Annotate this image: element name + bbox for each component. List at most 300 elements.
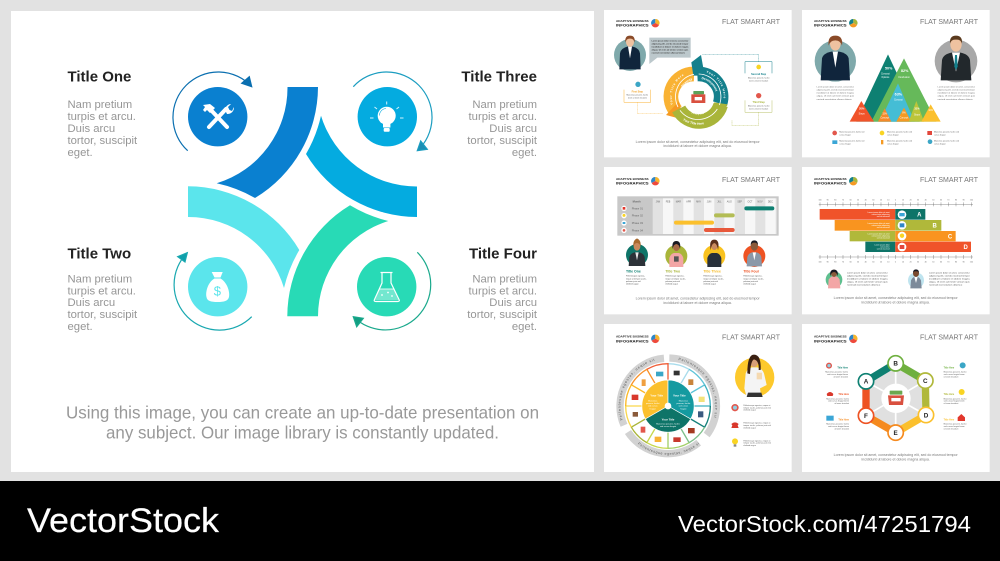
bar labels: Lorem ipsum dolor xyxy=(875,244,890,246)
group: Title One xyxy=(68,68,138,159)
pie labels: posuere, facilisi xyxy=(646,402,660,405)
list text: Pellentesque egestas, neque at xyxy=(743,404,771,407)
bar letters: A xyxy=(917,213,922,219)
text block: left: nostrud exercitation ullamco xyxy=(847,284,881,287)
pyramid labels: 8% xyxy=(902,112,906,114)
axis: bottom: 100 xyxy=(970,261,973,263)
gantt labels: AUG xyxy=(727,200,732,203)
step: third: Third Step xyxy=(753,101,765,104)
legend: cursus feugiat xyxy=(887,133,899,136)
speech bubble: incididunt ut labore et dolore magna xyxy=(652,46,689,49)
text block: tortor, suscipit xyxy=(68,309,138,321)
portrait: man xyxy=(908,269,924,288)
gantt labels: FEB xyxy=(666,201,671,203)
title blocks xyxy=(626,269,764,286)
text block: tortor, suscipit xyxy=(467,309,538,321)
gantt labels: Phase 01 xyxy=(632,206,643,210)
axis: bottom: 70 xyxy=(947,261,949,263)
gantt labels xyxy=(632,200,773,232)
speech bubble: adipiscing elit, sed do eiusmod tempor xyxy=(652,43,688,46)
text block: right: incididunt ut labore et dolore magna xyxy=(929,278,971,281)
list text: Pellentesque egestas, neque at xyxy=(743,422,771,425)
heading: Title Two xyxy=(68,246,131,262)
pyramid labels: Steps xyxy=(914,113,921,116)
legend: cursus feugiat xyxy=(839,142,851,145)
caption: any subject. Our image library is constantly updated. xyxy=(106,422,499,442)
speech bubble: Lorem ipsum dolor sit amet, consectetur xyxy=(652,40,688,43)
pie labels: sed cursus xyxy=(648,405,657,408)
axis: top: 100 xyxy=(818,199,822,201)
curved segment: cyan xyxy=(188,186,299,288)
list text: tempor iaculis, pulvinar justo nisl xyxy=(743,406,772,409)
text block: right: Lorem ipsum dolor sit amet, consectetur xyxy=(938,86,975,89)
right labels: Maecenas posuere, facilisi xyxy=(944,397,967,400)
title blocks: pulvinar justo nisl xyxy=(743,280,759,283)
text block: right: aliqua. Ut enim ad minim veniam quis xyxy=(929,281,970,284)
wheel: outer arrows xyxy=(620,358,716,454)
step: third xyxy=(732,93,772,126)
axis: top: 20 xyxy=(910,199,912,201)
list text: tempor iaculis, pulvinar justo nisl xyxy=(743,442,772,445)
hexagon: letters: E xyxy=(894,430,898,437)
caption xyxy=(834,453,959,461)
axis: top: 40 xyxy=(865,199,867,201)
pie labels: feugiat xyxy=(650,407,656,410)
header: FLAT SMART ART xyxy=(920,177,979,184)
axis: top: 80 xyxy=(834,199,836,201)
speech bubble xyxy=(649,38,691,64)
gantt labels: NOV xyxy=(757,201,763,203)
axis: bottom: 20 xyxy=(880,261,882,263)
portrait: four xyxy=(743,240,765,267)
title blocks: eleifend augue xyxy=(626,284,639,286)
text block: eget. xyxy=(512,147,537,159)
legend: Maecenas posuere, facilisi sed xyxy=(839,132,864,134)
left labels: Maecenas posuere, facilisi xyxy=(825,371,849,374)
hexagon: letters: B xyxy=(893,361,898,368)
header: FLAT SMART ART xyxy=(722,19,781,26)
gantt labels: Phase 04 xyxy=(632,228,643,232)
title blocks: pulvinar justo nisl xyxy=(626,280,641,283)
step: first xyxy=(624,82,663,114)
panel: gantt chart thumbnail xyxy=(604,167,792,314)
caption xyxy=(66,402,539,442)
header: FLAT SMART ART xyxy=(920,335,979,342)
caption: Lorem ipsum dolor sit amet, consectetur adipiscing elit, sed do eiusmod tempor xyxy=(834,296,959,300)
footer bar xyxy=(0,481,1000,561)
right labels: sed cursus feugiat lorem xyxy=(944,425,965,428)
portrait: woman xyxy=(735,355,774,397)
bar labels: consectetur adipiscing xyxy=(872,224,890,227)
brand name: VectorStock xyxy=(27,502,220,540)
right labels: Title Here xyxy=(944,367,955,370)
axis: top: 100 xyxy=(970,199,973,201)
icon: money bag xyxy=(188,257,247,316)
title blocks: eleifend augue xyxy=(703,284,716,286)
logo xyxy=(814,19,858,28)
text block: Nam pretium xyxy=(472,274,537,286)
text block: eget. xyxy=(512,321,537,333)
pie labels: sed cursus xyxy=(679,405,688,408)
panel: pyramid diagram thumbnail xyxy=(802,10,990,157)
axis: bottom: 100 xyxy=(818,261,822,263)
left labels: ut lorem tincidunt xyxy=(834,427,849,430)
list text xyxy=(743,404,772,447)
pyramid labels: Options xyxy=(881,76,890,79)
logo: ADAPTIVE BUSINESS xyxy=(616,19,649,23)
step: first: First Step xyxy=(632,91,644,94)
bar letters: B xyxy=(933,224,938,230)
axis: top: 30 xyxy=(872,199,874,201)
text block: right: adipiscing elit, sed do eiusmod tempor xyxy=(929,275,970,278)
gantt labels: MAR xyxy=(676,200,681,203)
axis: top: 80 xyxy=(955,199,957,201)
wheel: segment outlines xyxy=(626,364,710,448)
cycle labels xyxy=(670,70,726,125)
text block: right xyxy=(938,86,976,101)
bar labels: consectetur xyxy=(880,245,890,248)
portrait: one xyxy=(626,238,648,266)
group: Title Four xyxy=(467,246,538,333)
wheel: outer ring labels: Pellentesque egestas, neque sit xyxy=(678,358,718,418)
legend: cursus feugiat xyxy=(839,133,851,136)
text block: Nam pretium xyxy=(472,99,537,111)
title blocks: neque at tempor iaculis, xyxy=(743,277,764,280)
left labels: sed cursus feugiat lorem xyxy=(827,373,848,376)
panel: hexagon diagram thumbnail xyxy=(802,324,990,472)
text block: Nam pretium xyxy=(68,99,132,111)
title blocks: Pellentesque egestas, xyxy=(703,275,723,278)
text block: left: Lorem ipsum dolor sit amet, consectetur xyxy=(847,272,888,275)
logo xyxy=(616,335,660,343)
axis: top: 90 xyxy=(963,199,965,201)
wheel: outer ring labels: Pellentesque egestas, neque sit xyxy=(638,442,700,456)
text block: eget. xyxy=(68,321,93,333)
hexagon: letters: F xyxy=(864,413,868,420)
left labels: ut lorem tincidunt xyxy=(834,402,849,405)
bar labels: sed do eiusmod xyxy=(877,238,890,240)
gantt labels: JAN xyxy=(656,200,661,203)
right labels: sed cursus feugiat lorem xyxy=(944,400,965,403)
wheel: segment icons xyxy=(632,371,705,442)
left labels: Maecenas posuere, facilisi xyxy=(826,423,850,426)
axis: bottom: 50 xyxy=(857,261,859,263)
list text: eleifend augue xyxy=(743,427,756,429)
caption: Lorem ipsum dolor sit amet, consectetur adipiscing elit, sed do eiusmod tempor xyxy=(636,140,761,144)
axis: top: 70 xyxy=(842,199,844,201)
title blocks: eleifend augue xyxy=(665,284,678,286)
cycle labels: Your Title Here xyxy=(706,70,726,98)
image url: VectorStock.com/47251794 xyxy=(678,511,971,537)
pie labels: Maecenas xyxy=(679,400,688,402)
step: first: lorem ut lorem tincidunt xyxy=(628,97,647,100)
axis: top: 60 xyxy=(850,199,852,201)
bar labels: Lorem ipsum dolor sit amet xyxy=(868,211,890,214)
title blocks: Title Two xyxy=(665,269,680,273)
heading: Title Four xyxy=(469,246,537,262)
text block: left: adipiscing elit, sed do eiusmod tempor xyxy=(817,89,854,92)
text block: turpis et arcu. xyxy=(68,286,136,298)
title blocks: Pellentesque egestas, xyxy=(665,275,685,278)
pie labels: Your Title xyxy=(650,393,663,397)
logo: ADAPTIVE BUSINESS xyxy=(814,177,847,181)
arrow: cyan ring xyxy=(174,253,252,330)
pyramid labels: 10% xyxy=(928,110,933,112)
logo: INFOGRAPHICS xyxy=(616,23,649,28)
bar labels: consectetur adipiscing xyxy=(872,235,890,238)
pyramid labels: 15% xyxy=(882,114,887,116)
axis: bottom: 0 xyxy=(895,261,896,263)
text block: turpis et arcu. xyxy=(469,286,537,298)
text block: right: nostrud exercitation ullamco laboris xyxy=(938,98,973,101)
axis: bottom: 30 xyxy=(917,261,919,263)
step: first: Maecenas posuere, facilisi xyxy=(627,95,649,97)
wheel: outer ring labels: Pellentesque egestas, neque sit xyxy=(618,358,655,420)
hexagon: letters xyxy=(864,361,929,437)
logo: ADAPTIVE BUSINESS xyxy=(814,335,847,339)
title blocks: Title Four xyxy=(743,269,760,273)
gantt chart xyxy=(617,196,779,236)
pyramid labels: Conclusion xyxy=(898,77,910,79)
right labels xyxy=(944,362,967,430)
axis: bottom: 90 xyxy=(827,261,829,263)
caption: incididunt ut labore et dolore magna aliqua. xyxy=(663,301,732,305)
speech bubble: nostrud exercitation ullamco laboris xyxy=(652,52,686,55)
pyramid labels: 20% xyxy=(859,107,865,111)
wheel: outer ring labels xyxy=(618,358,718,456)
text block: turpis et arcu. xyxy=(68,111,136,123)
gantt row icons xyxy=(621,206,627,233)
title blocks: eleifend augue xyxy=(743,284,756,286)
text block: right: adipiscing elit, sed do eiusmod tempor xyxy=(938,89,975,92)
axis: bottom: 40 xyxy=(865,261,867,263)
legend: cursus feugiat xyxy=(934,133,946,136)
portrait: woman xyxy=(826,270,842,288)
bar labels: Lorem ipsum dolor sit amet xyxy=(868,233,890,236)
axis: top: 20 xyxy=(880,199,882,201)
title blocks: Title One xyxy=(626,269,641,273)
legend: cursus feugiat xyxy=(934,142,946,145)
bar labels: consectetur adipiscing xyxy=(872,213,890,216)
heading: Title Three xyxy=(461,68,537,86)
bar letters: D xyxy=(964,245,969,251)
bar labels: sed do eiusmod xyxy=(877,216,890,218)
text block: left: incididunt ut labore et dolore magna xyxy=(817,92,855,95)
pie labels: Maecenas xyxy=(648,400,657,402)
cycle labels: Development xyxy=(702,76,718,92)
pyramid labels xyxy=(859,66,933,119)
right labels: ut lorem tincidunt xyxy=(944,427,959,430)
text block xyxy=(467,274,538,333)
pyramid labels: 63% xyxy=(895,93,903,97)
text block: left: nostrud exercitation ullamco laboris xyxy=(817,98,852,101)
portrait: two xyxy=(665,241,687,267)
list text: eleifend augue xyxy=(743,445,756,447)
step: second: Second Step xyxy=(751,73,767,76)
left labels: Title Here xyxy=(838,393,850,396)
legend: Maecenas posuere, facilisi sed xyxy=(839,141,864,143)
logo: INFOGRAPHICS xyxy=(616,338,649,343)
logo: ADAPTIVE BUSINESS xyxy=(814,19,847,23)
right labels: Maecenas posuere, facilisi xyxy=(944,371,967,374)
icon: flask xyxy=(357,257,416,316)
curved segment: green xyxy=(287,205,388,316)
legend: Maecenas posuere, facilisi sed xyxy=(887,132,912,134)
title blocks: Pellentesque egestas, xyxy=(743,275,763,278)
text block: Duis arcu xyxy=(489,297,537,309)
legend xyxy=(832,131,959,145)
gantt labels: Phase 02 xyxy=(632,214,643,218)
title blocks: pulvinar justo nisl xyxy=(703,280,719,283)
bar labels: sed do eiusmod xyxy=(877,227,890,229)
logo: INFOGRAPHICS xyxy=(616,181,649,186)
axis: bottom: 70 xyxy=(842,261,844,263)
pie labels: sed cursus feugiat xyxy=(660,425,676,428)
text block: left: aliqua. Ut enim ad minim veniam quis xyxy=(817,95,854,98)
logo xyxy=(814,177,858,186)
hexagon: letters: A xyxy=(864,379,869,386)
hexagon: edges xyxy=(866,363,926,433)
pyramid labels: Concept xyxy=(900,116,909,119)
cycle labels: Your Title Here xyxy=(670,74,684,106)
text block: right: Lorem ipsum dolor sit amet, consectetur xyxy=(929,272,970,275)
logo: INFOGRAPHICS xyxy=(814,23,847,28)
axis: top xyxy=(818,199,973,206)
caption xyxy=(636,140,761,148)
axis: bottom: 60 xyxy=(850,261,852,263)
right labels: ut lorem tincidunt xyxy=(944,375,959,378)
axis: bottom: 10 xyxy=(902,261,904,263)
text block: right xyxy=(929,272,971,287)
axis: bottom: 90 xyxy=(963,261,965,263)
hexagon: inner xyxy=(866,363,926,433)
text block: left: aliqua. Ut enim ad minim veniam quis xyxy=(847,281,888,284)
legend: Maecenas posuere, facilisi sed xyxy=(934,132,959,134)
gantt bars xyxy=(744,206,774,210)
gantt labels: Month xyxy=(633,200,641,204)
legend: Maecenas posuere, facilisi sed xyxy=(887,141,912,143)
axis: top: 90 xyxy=(827,199,829,201)
bar letters xyxy=(917,213,969,251)
text block: right: incididunt ut labore et dolore magna xyxy=(938,92,976,95)
text block: Duis arcu xyxy=(68,297,115,309)
hexagon: letters: C xyxy=(923,378,928,385)
arrow: dark blue ring xyxy=(173,72,252,151)
text block xyxy=(68,274,138,333)
text block: tortor, suscipit xyxy=(68,135,138,147)
pyramid labels: Steps xyxy=(859,113,865,116)
gantt labels: SEP xyxy=(737,201,742,203)
logo xyxy=(814,335,858,343)
arrow: green ring xyxy=(353,252,431,330)
icon: alarm clock xyxy=(731,404,739,411)
panel: main four-part diagram xyxy=(11,11,594,472)
heading: Title One xyxy=(68,68,131,86)
step: second: Maecenas posuere, facilisi xyxy=(748,77,770,79)
text block: left xyxy=(817,86,855,101)
axis: bottom: 30 xyxy=(872,261,874,263)
text block: eget. xyxy=(68,147,93,159)
text block: right: aliqua. Ut enim ad minim veniam quis xyxy=(938,95,975,98)
header: FLAT SMART ART xyxy=(722,177,781,184)
text block: tortor, suscipit xyxy=(467,135,538,147)
caption xyxy=(834,296,959,304)
icon: light bulb xyxy=(358,87,417,146)
left labels: Maecenas posuere, facilisi xyxy=(826,397,850,400)
axis: bottom: 40 xyxy=(925,261,927,263)
cycle labels: Strategy xyxy=(681,78,692,86)
step: second: lorem ut lorem tincidunt xyxy=(749,79,769,82)
bars chart xyxy=(820,209,971,252)
right labels: Maecenas posuere, facilisi xyxy=(944,423,967,426)
portrait: woman xyxy=(815,36,856,82)
axis: bottom: 80 xyxy=(955,261,957,263)
hexagon: nodes xyxy=(858,356,934,440)
pyramids chart xyxy=(850,54,941,122)
pyramid labels: 31% xyxy=(914,107,920,111)
axis: bottom: 10 xyxy=(887,261,889,263)
axis: bottom xyxy=(818,255,973,263)
group: Title Three xyxy=(461,68,538,159)
portrait xyxy=(614,36,646,71)
text block: turpis et arcu. xyxy=(469,111,537,123)
pie labels xyxy=(646,393,691,428)
logo: INFOGRAPHICS xyxy=(814,338,847,343)
icon: center shop xyxy=(691,91,705,103)
text block: right: nostrud exercitation ullamco xyxy=(929,284,963,287)
list text: eleifend augue xyxy=(743,410,756,412)
logo xyxy=(616,19,660,28)
text block: left: Lorem ipsum dolor sit amet, consectetur xyxy=(817,86,854,89)
axis: bottom: 80 xyxy=(834,261,836,263)
pie labels: posuere, facilisi xyxy=(676,402,691,405)
axis: bottom: 50 xyxy=(932,261,934,263)
gantt labels: JUN xyxy=(707,201,712,203)
icon: center shop xyxy=(888,391,904,405)
pie labels: feugiat xyxy=(680,407,687,410)
cycle arrows xyxy=(666,55,728,122)
arrow: light blue ring xyxy=(353,72,432,151)
caption: Lorem ipsum dolor sit amet, consectetur adipiscing elit, sed do eiusmod tempor xyxy=(636,297,761,301)
axis: top: 10 xyxy=(902,199,904,201)
gantt labels: OCT xyxy=(748,201,753,203)
step: third: lorem ut lorem tincidunt xyxy=(749,107,769,110)
hexagon: letters: D xyxy=(924,412,929,419)
pyramid labels: Concept xyxy=(880,116,889,119)
axis: top: 60 xyxy=(940,199,942,201)
axis: top: 30 xyxy=(917,199,919,201)
cycle labels: Analysis xyxy=(691,112,704,116)
text block xyxy=(467,99,538,159)
text block: left xyxy=(847,272,889,287)
group: Title Two xyxy=(68,246,138,333)
axis: top: 40 xyxy=(925,199,927,201)
pyramid labels: Concept xyxy=(894,98,903,101)
pyramid labels: 82% xyxy=(901,69,909,73)
pie labels: Your Title xyxy=(673,393,686,397)
gantt labels: APR xyxy=(686,200,691,203)
step: second xyxy=(702,54,772,82)
pie labels: Your Title xyxy=(662,418,675,422)
caption: Using this image, you can create an up-to-date presentation on xyxy=(66,402,539,422)
caption: incididunt ut labore et dolore magna aliqua. xyxy=(861,457,930,461)
speech bubble: aliqua. Ut enim ad minim veniam quis xyxy=(652,49,689,52)
step: third: Maecenas posuere, facilisi xyxy=(748,105,770,107)
title blocks: Title Three xyxy=(703,269,721,273)
bar labels: Lorem ipsum dolor sit amet xyxy=(868,222,890,225)
logo xyxy=(616,177,660,186)
legend: cursus feugiat xyxy=(887,142,899,145)
